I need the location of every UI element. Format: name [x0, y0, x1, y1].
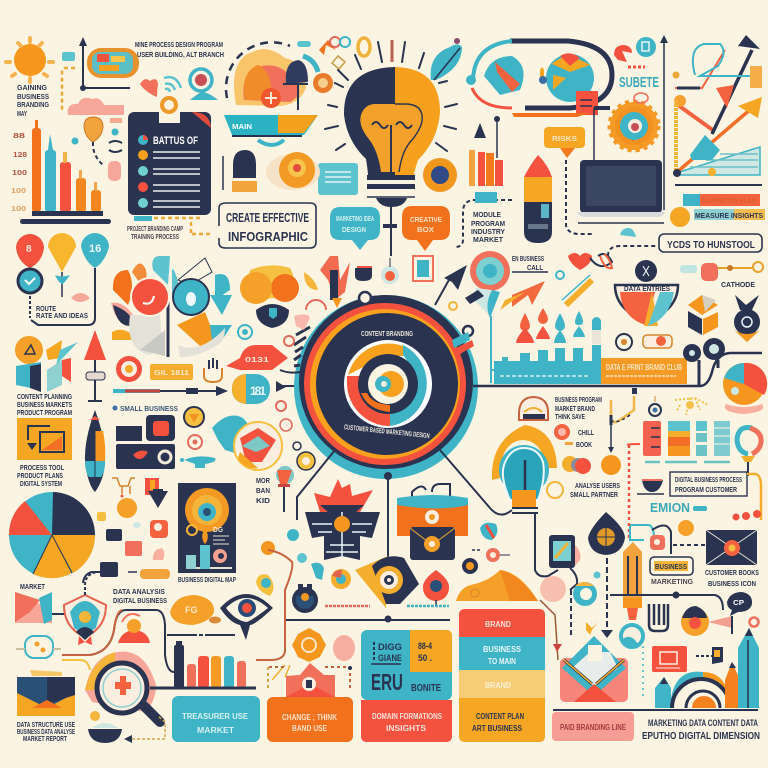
icon: pencils and arcs skyline [655, 628, 759, 708]
connectors from center [297, 278, 762, 562]
speech bubble orange [402, 206, 450, 251]
gauge and text [519, 397, 602, 421]
icon: heart and arrow [500, 253, 612, 310]
small round icons [180, 407, 216, 468]
icon: gear with card [266, 152, 358, 195]
icon: envelope red teal: MARKET [20, 584, 46, 591]
icon: sun gear [423, 158, 457, 192]
dashed text box: INDUSTRY [471, 229, 505, 236]
icon: target and tag [116, 356, 222, 382]
circle segments [344, 340, 432, 428]
text label top of right chart [512, 256, 548, 272]
panel: colored info grid: 88-4 [418, 641, 432, 651]
chart: bottles [150, 635, 256, 688]
icon: pencil bars [469, 116, 503, 186]
connector axis with map blob [62, 37, 139, 110]
connector and speech bubble: CP [733, 600, 744, 607]
dashed text box: MODULE [473, 212, 501, 219]
panel: orange text card: BAND USE [292, 724, 328, 733]
bulb top ray coloured [390, 40, 394, 62]
icon: shield with ribbon [64, 572, 106, 645]
panel: colored info grid: DIGG [378, 642, 402, 652]
bar chart: 100 [11, 188, 26, 195]
small list icons right of bulb: BOOK [576, 442, 592, 449]
icon: hook with orange ball [601, 388, 637, 475]
checklist heading: BATTUS OF [153, 135, 198, 147]
speech bubble teal: DESIGN [342, 227, 366, 234]
text block bottom-left: MARKET REPORT [23, 736, 68, 743]
icon: leaf capsule [85, 410, 105, 492]
dashed text box [455, 192, 512, 247]
icon: pencil [623, 542, 642, 620]
text block under book [17, 394, 72, 417]
panel: teal text card: MARKET [197, 726, 234, 735]
icon: orange badge and salmon pill [268, 628, 355, 690]
panel: teal and orange band [494, 358, 687, 384]
icon: red question and teal circle [614, 37, 656, 67]
icon: red house [286, 663, 335, 697]
pill teal with numbers [232, 374, 270, 404]
banner [224, 115, 318, 145]
icon: red arrow post [84, 330, 106, 401]
bar chart [11, 120, 111, 224]
text block under orange box: DIGITAL SYSTEM [20, 481, 62, 488]
icon: medal [734, 295, 760, 342]
bar chart: 88 [13, 133, 25, 140]
text block under orange box: PROCESS TOOL [20, 465, 65, 472]
icon: sunflower [610, 93, 658, 150]
small list icons right of bulb: SMALL PARTNER [570, 492, 618, 499]
icon: navy drop and dashes [588, 512, 625, 638]
speech bubble orange: CREATIVE [410, 217, 442, 224]
icon: orange cube [688, 295, 718, 335]
icon: feather [431, 38, 462, 80]
title box: INFOGRAPHIC [228, 229, 309, 244]
icon: envelope [560, 636, 628, 702]
icon: red drop [423, 570, 449, 606]
icon: capsule ring [16, 636, 61, 658]
poster caption: BUSINESS DIGITAL MAP [178, 577, 236, 584]
text block left: GAINING [17, 85, 48, 92]
text label top of right chart: EN BUSINESS [512, 256, 544, 263]
bulb rays [325, 42, 457, 151]
panel: stacked colored column [459, 609, 545, 742]
wavy strips and horizontal line [256, 541, 450, 660]
icon: small ring and sparkle [649, 396, 708, 416]
checklist items [138, 135, 200, 208]
icon: webcam [190, 69, 218, 100]
text box small [650, 557, 759, 588]
icon: teal creature and globe [212, 416, 282, 470]
icons: bowl pie and badges [615, 260, 678, 350]
bar chart: 100 [12, 170, 27, 177]
blob speech orange: FG [185, 605, 198, 615]
text block under book: BUSINESS MARKETS [17, 402, 72, 409]
icon: speech hearts left of target [238, 265, 326, 470]
icon: navy device [535, 512, 580, 590]
curved bottom label: CUSTOMER BASED MARKETING DESIGN [344, 424, 430, 440]
small teal and flower icons [256, 529, 351, 613]
line chart with arrows [672, 35, 762, 177]
icon: envelope red teal [15, 584, 66, 624]
text block bottom-right [642, 718, 760, 742]
icon: teal red ring [737, 428, 761, 476]
panel: teal text card: TREASURER USE [182, 712, 249, 721]
panel: colored info grid: 50 . [418, 653, 432, 663]
icon: laptop [577, 160, 665, 237]
text box small: BUSINESS [655, 564, 687, 571]
text block top: USER BUILDING, ALT BRANCH [137, 52, 224, 59]
icons: bracket and dots right of pencil [630, 520, 706, 554]
text box with bowl: PROGRAM CUSTOMER [675, 487, 737, 494]
speech bubble teal [330, 207, 380, 250]
icon: funnel marks and shield arrow [83, 478, 170, 583]
blob speech orange [170, 595, 221, 625]
panel: colored info grid: GIANE [378, 653, 402, 663]
icon: top right tags [680, 262, 763, 289]
text label top of right chart: CALL [527, 265, 544, 272]
pins row: circles with cones: RATE AND IDEAS [36, 313, 88, 320]
title box: CREATE EFFECTIVE [226, 210, 309, 225]
heading and camera panels: SMALL BUSINESS [120, 406, 178, 413]
banner: MAIN [232, 124, 252, 131]
heading: emion [650, 500, 761, 520]
panel: orange text card: CHANGE ; THINK [282, 713, 337, 722]
small list icons right of bulb: CHILL [578, 430, 595, 437]
speech tag red [226, 345, 288, 370]
loop track with globes [466, 41, 612, 117]
text box small: BUSINESS ICON [708, 581, 756, 588]
text block center-left [113, 589, 167, 605]
chart: striped columns [643, 421, 730, 462]
text box with bowl [627, 444, 761, 540]
callout orange [544, 127, 592, 234]
chart baseline and legend bars: MEASURE INSIGHTS [695, 213, 763, 220]
text block bottom-left: DATA STRUCTURE USE [17, 722, 75, 729]
text block top: MINE PROCESS DESIGN PROGRAM [135, 42, 223, 49]
panel: stacked colored column: TO MAIN [488, 657, 516, 666]
panel: stacked colored column: BRAND [485, 681, 511, 690]
gauge and text: THINK SAVE [555, 414, 585, 421]
text block top [135, 42, 224, 59]
icon: teal crescent [621, 625, 643, 700]
heading: subete: SUBETE [619, 74, 659, 91]
icon: red screen and marker [652, 646, 723, 672]
chart baseline and legend bars: MARKETING PLAN [702, 198, 756, 205]
icon: small lamp left of emblem: BAN [256, 488, 270, 495]
panel: orange chart box [17, 418, 72, 460]
icon: main light bulb [325, 42, 457, 256]
icons: bowl pie and badges: DATA ENTRIES [624, 286, 670, 293]
clipboard caption and dashes: TRAINING PROCESS [131, 234, 179, 241]
text block center-left: DATA ANALYSIS [113, 589, 165, 596]
pie chart [9, 492, 95, 578]
clipboard caption and dashes: PROJECT BRANDING CAMP [127, 226, 183, 233]
icon: balloon and small marks [72, 117, 122, 181]
speech bubble orange: BOX [417, 227, 434, 234]
panel: orange text card [267, 697, 353, 742]
long arrow [113, 381, 300, 396]
curved top label: CONTENT BRANDING [361, 331, 413, 338]
icon: figure and small marks above target [320, 256, 433, 308]
text block bottom-left [17, 722, 75, 743]
text block left: BRANDING [17, 102, 49, 109]
navy envelope [706, 530, 757, 565]
icon: orange dome [456, 570, 538, 601]
gauge and text: MARKET BRAND [555, 406, 595, 413]
panel: navy poster [178, 483, 236, 573]
emblem: cross [305, 479, 380, 560]
heading and camera panels [112, 406, 178, 469]
panel: colored info grid: ERU [371, 669, 403, 695]
icon: small lamp left of emblem [256, 466, 294, 512]
icon: briefcase and envelope [397, 484, 468, 560]
speech bubble teal: MARKETING IDEA [336, 216, 374, 223]
panel: stacked colored column: BRAND [485, 620, 511, 629]
pins row: circles with cones [16, 233, 109, 325]
icon: fork and helmet [649, 604, 758, 636]
icon: box open [17, 670, 75, 716]
panel: stacked colored column: ART BUSINESS [472, 724, 523, 733]
panel: teal and orange band: DATA E PRINT BRAND CLUB [606, 363, 682, 372]
title pill: tools [608, 234, 762, 256]
icon: colored ring pin [449, 251, 510, 383]
text block under book: CONTENT PLANNING [17, 394, 72, 401]
main target circle [294, 295, 478, 479]
long vertical arrow [594, 35, 668, 210]
text block under orange box: PRODUCT PLANS [17, 473, 63, 480]
gauge and text: BUSINESS PROGRAM [555, 397, 602, 404]
icon: top right tags: CATHODE [721, 282, 755, 289]
icon: small lamp left of emblem: KID [256, 498, 270, 505]
icon: robot with arrow [223, 150, 257, 192]
pill teal with numbers: 1 8 1 [250, 384, 266, 398]
panel: colored info grid: BONITE [411, 683, 441, 694]
icon: idea cloud [226, 42, 318, 110]
bar chart: 100 [11, 206, 26, 213]
icon: cloud [68, 98, 124, 115]
heading: emion: EMION [650, 500, 690, 515]
icon: eye drop with diamond [355, 556, 419, 608]
top decorative glyphs [297, 37, 370, 93]
text block left [17, 85, 49, 118]
small list icons right of bulb [547, 424, 620, 499]
pins row: circles with cones: 8 [26, 244, 32, 255]
chart baseline and legend bars [670, 185, 765, 227]
icon: crystal ball [723, 363, 767, 414]
text box small: MARKETING [651, 579, 694, 586]
pins row: circles with cones: 16 [89, 243, 101, 255]
text block bottom-left: BUSINESS DATA ANALYSE [17, 729, 75, 736]
chart: drops and bars [502, 308, 601, 371]
icon: capsule rocket [524, 155, 552, 243]
dashed text box: MARKET [473, 237, 504, 244]
icon: right bulb with arc [492, 425, 557, 513]
icon: small lamp left of emblem: MOR [256, 478, 270, 485]
panel: teal text card [172, 696, 260, 742]
text block left: MAY [17, 111, 27, 118]
pins row: circles with cones: ROUTE [36, 306, 56, 313]
small list icons right of bulb: ANALYSE USERS [575, 483, 620, 490]
icon: eye speech [220, 594, 273, 640]
text block under orange box [17, 465, 65, 488]
clipboard caption and dashes [127, 216, 212, 241]
connector and speech bubble [610, 592, 752, 616]
speech tag red: 0131 [245, 357, 269, 364]
icon: heart and wifi [140, 77, 181, 97]
icon: gear and open book [16, 337, 78, 392]
title box [219, 203, 316, 248]
icons: peach balloon and teal gear [540, 576, 598, 660]
panel: stacked colored column: CONTENT PLAN [476, 712, 524, 721]
ring accents [280, 292, 474, 373]
panel: stacked colored column: BUSINESS [483, 645, 522, 654]
connector paths [62, 610, 174, 672]
panel: colored info grid: INSIGHTS [386, 724, 427, 733]
icon: headset [683, 338, 725, 385]
text block center-left: DIGITAL BUSINESS [113, 598, 167, 605]
small icons above dome [462, 523, 510, 574]
text block left: BUSINESS [17, 94, 49, 101]
panel: pink label and rule: PAID BRANDING LINE [560, 723, 627, 732]
icon: navy arrow head [444, 265, 467, 290]
bulb base [367, 175, 415, 256]
icon: sun [6, 38, 53, 82]
panel: colored info grid [361, 630, 452, 742]
panel: colored info grid: DOMAIN FORMATIONS [372, 712, 443, 721]
icon: person [118, 614, 150, 643]
text block under book: PRODUCT PROGRAM [17, 410, 72, 417]
panel: navy poster: DG [213, 527, 224, 534]
callout orange: RISKS [552, 136, 577, 143]
bowl and arrow [88, 711, 165, 743]
icon: target and tag: GIL 1811 [154, 370, 189, 377]
dashed text box: PROGRAM [471, 221, 505, 228]
icon: magnifier [85, 652, 160, 722]
panel: clipboard checklist [128, 98, 211, 215]
icon: flower bouquet [111, 256, 232, 357]
bar chart: 128 [13, 152, 27, 159]
panel: pink label and rule [552, 710, 758, 741]
